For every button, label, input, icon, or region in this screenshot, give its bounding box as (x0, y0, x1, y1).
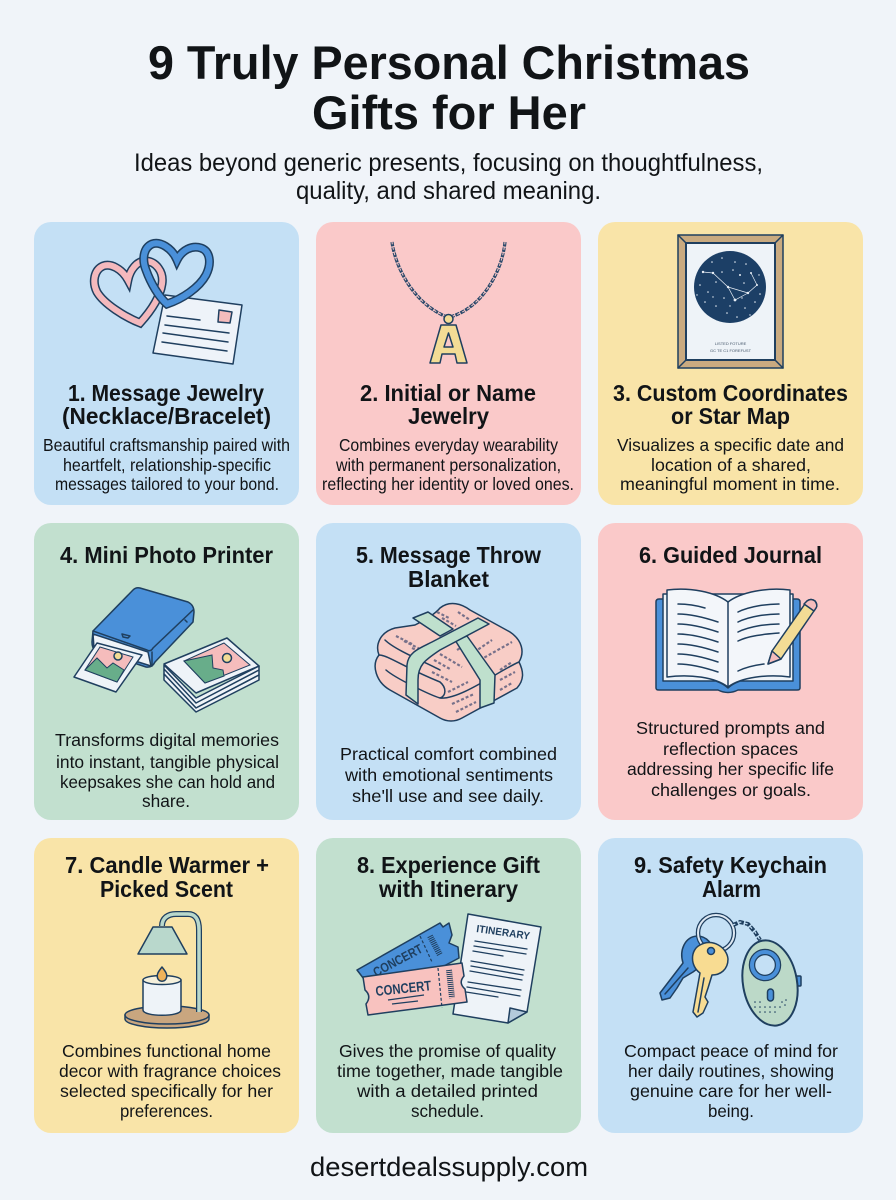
heading: 8. Experience Gift (357, 852, 540, 878)
description: into instant, tangible physical (56, 752, 279, 772)
description: challenges or goals. (651, 780, 811, 800)
description (59, 1041, 281, 1121)
description: selected specifically for her (60, 1081, 273, 1101)
title (148, 36, 750, 139)
subtitle: Ideas beyond generic presents, focusing on thoughtfulness, (134, 149, 763, 177)
panel: 2 initial or name jewelry (316, 222, 581, 505)
heading: 3. Custom Coordinates (613, 380, 848, 406)
icon: concert tickets and itinerary: ITINERARY (476, 923, 531, 942)
description (337, 1041, 563, 1121)
description: her daily routines, showing (628, 1061, 834, 1081)
description: Beautiful craftsmanship paired with (43, 435, 290, 455)
description: Combines functional home (62, 1041, 271, 1061)
panel: 7 candle warmer (34, 838, 299, 1133)
heading: Picked Scent (100, 876, 233, 902)
heading: Blanket (408, 566, 489, 592)
description: with a detailed printed (356, 1081, 538, 1101)
panel: 9 safety keychain alarm (598, 838, 863, 1133)
heading (613, 380, 848, 429)
description: being. (708, 1101, 754, 1121)
description: with permanent personalization, (335, 455, 561, 475)
description: Combines everyday wearability (339, 435, 558, 455)
icon: framed star map: LISTED FOTURE (715, 341, 747, 346)
description: schedule. (411, 1101, 484, 1121)
title: Gifts for Her (312, 86, 586, 139)
icon: linked hearts and postcard (94, 243, 242, 364)
description: meaningful moment in time. (620, 474, 840, 494)
heading (356, 542, 541, 592)
icon: framed star map (678, 235, 783, 368)
icon: photo printer and stack (74, 588, 259, 712)
icon: keys and alarm fob (660, 915, 804, 1030)
description: reflecting her identity or loved ones. (322, 474, 574, 494)
heading: or Star Map (671, 403, 790, 429)
description: Visualizes a specific date and (617, 435, 844, 455)
subtitle: quality, and shared meaning. (296, 177, 601, 205)
icon: framed star map: GC TE C1 FOREFUST (710, 348, 752, 353)
heading (65, 852, 269, 902)
icon: folded throw blanket (375, 604, 523, 721)
heading: 6. Guided Journal (639, 542, 822, 568)
description (55, 730, 279, 811)
description: genuine care for her well- (630, 1081, 832, 1101)
description: messages tailored to your bond. (55, 474, 279, 494)
heading: (Necklace/Bracelet) (62, 403, 271, 429)
icon: concert tickets and itinerary (357, 914, 541, 1023)
footer: website: desertdealssupply.com (310, 1152, 588, 1182)
description: keepsakes she can hold and (60, 772, 275, 792)
description: Compact peace of mind for (624, 1041, 838, 1061)
description: Structured prompts and (636, 718, 825, 738)
panel: 1 message jewelry (34, 222, 299, 505)
panel: 8 experience gift (316, 838, 581, 1133)
description: decor with fragrance choices (59, 1061, 281, 1081)
description (624, 1041, 838, 1121)
description: Gives the promise of quality (339, 1041, 556, 1061)
description: share. (142, 791, 190, 811)
heading: with Itinerary (378, 876, 518, 902)
subtitle (134, 149, 763, 205)
description (340, 744, 557, 806)
description: heartfelt, relationship-specific (63, 455, 271, 475)
heading: Alarm (702, 876, 761, 902)
panel: 6 guided journal (598, 523, 863, 820)
heading (62, 380, 271, 429)
description: time together, made tangible (337, 1061, 563, 1081)
description: Transforms digital memories (55, 730, 279, 750)
heading: 7. Candle Warmer + (65, 852, 269, 878)
panel: 5 message throw blanket (316, 523, 581, 820)
heading (360, 380, 536, 429)
heading: 1. Message Jewelry (68, 380, 264, 406)
icon: initial necklace (392, 242, 505, 363)
heading: 5. Message Throw (356, 542, 541, 568)
title: 9 Truly Personal Christmas (148, 36, 750, 89)
heading: 9. Safety Keychain (634, 852, 827, 878)
icon: concert tickets and itinerary: CONCERT (370, 941, 425, 980)
description: Practical comfort combined (340, 744, 557, 764)
description: location of a shared, (651, 455, 811, 475)
description (43, 435, 290, 494)
description (322, 435, 574, 494)
icon: concert tickets and itinerary: CONCERT (375, 977, 432, 999)
panel: 3 custom coordinates or star map (598, 222, 863, 505)
heading (357, 852, 540, 902)
icon: candle warmer lamp (125, 914, 209, 1028)
description: with emotional sentiments (344, 765, 553, 785)
description (617, 435, 844, 494)
description (627, 718, 834, 800)
icon: open journal with pencil (656, 589, 817, 692)
heading: 4. Mini Photo Printer (60, 542, 273, 568)
heading (634, 852, 827, 902)
description: addressing her specific life (627, 759, 834, 779)
description: she'll use and see daily. (352, 786, 544, 806)
panel: 4 mini photo printer (34, 523, 299, 820)
heading: Jewelry (408, 403, 489, 429)
description: preferences. (120, 1101, 213, 1121)
description: reflection spaces (663, 739, 798, 759)
heading: 2. Initial or Name (360, 380, 536, 406)
